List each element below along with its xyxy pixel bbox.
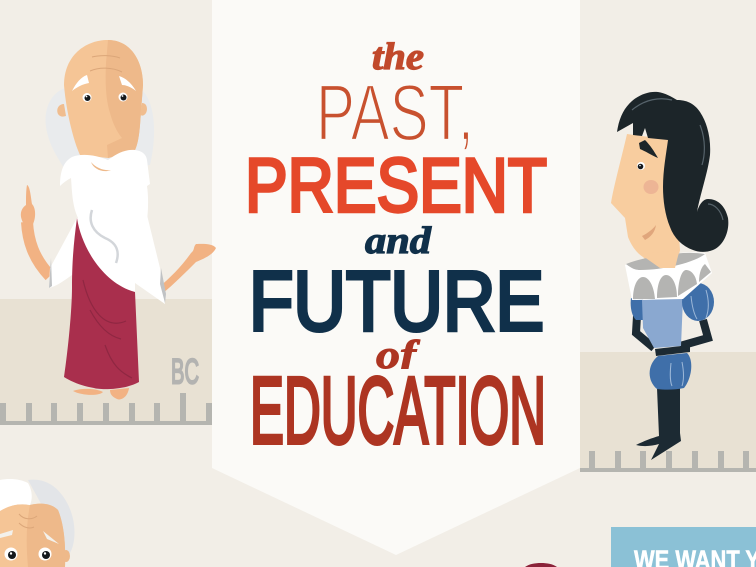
philosopher sleeve cuffs [49, 258, 166, 303]
figure mouth [642, 225, 656, 240]
BC label: BC [171, 352, 199, 392]
blue callout box [611, 527, 756, 567]
figure hair highlights [632, 99, 723, 220]
elder eyebrows [0, 530, 59, 544]
philosopher head [64, 40, 143, 158]
timeline ruler: BC [0, 393, 212, 425]
character: second elder, cropped at the bottom [0, 479, 74, 567]
philosopher right arm and hand [158, 244, 216, 294]
figure breeches [650, 353, 691, 390]
character: renaissance figure [611, 92, 728, 460]
philosopher back hair [46, 88, 154, 172]
philosopher eyebrows [72, 75, 136, 91]
figure hair [617, 92, 728, 252]
title word: PAST,: PAST, [316, 68, 474, 157]
character: bearded philosopher [21, 40, 216, 399]
figure legs and feet [636, 388, 681, 460]
elder face [0, 504, 65, 567]
right ground band [580, 352, 756, 471]
figure eye [637, 162, 645, 170]
philosopher forehead wrinkles [90, 56, 122, 72]
maroon circle, cropped at the bottom [525, 563, 557, 567]
figure arms [636, 316, 708, 348]
elder white hair [0, 479, 32, 511]
elder ear [62, 550, 70, 562]
philosopher white robe [49, 215, 165, 304]
title word: the: the [372, 36, 424, 78]
figure breeches highlight [670, 362, 684, 386]
philosopher face shadow [106, 40, 143, 158]
philosopher ears [57, 103, 147, 117]
figure belt [655, 345, 690, 356]
left ground band [0, 299, 212, 424]
philosopher feet [73, 388, 129, 399]
figure tunic [642, 298, 683, 348]
philosopher raised left arm [21, 185, 50, 276]
figure puff highlight [691, 290, 708, 319]
philosopher mouth [91, 162, 111, 171]
philosopher eyes [82, 92, 128, 102]
title [245, 36, 547, 464]
figure left shoulder puff [631, 298, 645, 320]
title word: PRESENT: PRESENT [245, 143, 547, 228]
elder wrinkles [19, 514, 37, 528]
title word: of: of [376, 332, 420, 377]
figure neck over collar [640, 250, 680, 268]
figure right shoulder puff [682, 283, 714, 321]
figure neck and face [611, 134, 680, 268]
timeline ruler: right [580, 451, 756, 472]
figure eyebrow [639, 140, 658, 158]
philosopher skirt folds [83, 280, 132, 378]
elder face shadow [27, 504, 65, 567]
philosopher beard [60, 150, 150, 262]
philosopher red skirt [64, 218, 139, 389]
title word: and: and [365, 220, 432, 262]
figure cheek [644, 180, 658, 194]
philosopher beard strand [91, 210, 118, 263]
elder hair back [28, 480, 74, 556]
figure ruff collar [625, 252, 712, 300]
elder eyes [4, 548, 52, 560]
title banner panel [212, 0, 580, 555]
title word: FUTURE: FUTURE [249, 254, 544, 348]
